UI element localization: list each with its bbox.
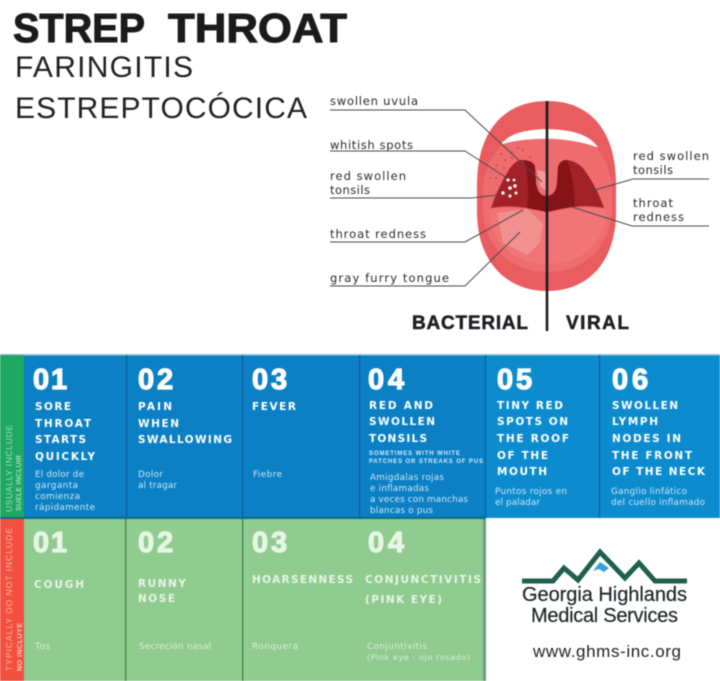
side label: usually include [0,355,24,518]
item: swollen lymph nodes [611,364,706,508]
callout: whitish spots [330,138,507,178]
logo: Georgia Highlands Medical Services: Georgia Highlands [522,584,687,606]
side label: do not include: TYPICALLY DO NOT INCLUDE [4,528,14,671]
item: red and swollen tonsils: SOMETIMES WITH WHITE [369,451,460,457]
item: hoarseness: HOARSENNESS [252,574,353,586]
item: swollen lymph nodes: OF THE NECK [612,466,706,478]
callout: viral throat redness: redness [633,210,684,224]
panel: typically do not include [0,517,486,681]
item: cough [33,527,84,652]
item: cough: 01 [33,527,67,559]
item: swollen lymph nodes: 06 [612,364,648,396]
callout: red swollen tonsils: red swollen [330,169,406,183]
title [13,5,347,125]
teeth [503,130,596,146]
icon: mountains [522,552,687,581]
item: conjunctivitis: CONJUNCTIVITIS [365,574,481,586]
callout: whitish spots: whitish spots [330,138,413,152]
item: sore throat: El dolor de [35,470,84,480]
item: hoarseness [252,527,353,652]
side label: usually include: SUELE INCLUIR [16,455,23,511]
callout: viral throat redness [572,196,709,226]
item: tiny red spots: OF THE [497,450,548,462]
side label: do not include [0,519,24,681]
item: tiny red spots: THE ROOF [497,433,569,445]
logo: Georgia Highlands Medical Services: www.ghms-inc.org [532,642,681,661]
item: red and swollen tonsils: SWOLLEN [369,416,435,428]
item: pain when swallowing: SWALLOWING [138,434,232,446]
item: swollen lymph nodes: THE FRONT [612,450,693,462]
palate red spots [489,147,531,179]
callout: swollen uvula: swollen uvula [330,94,418,108]
item: swollen lymph nodes: SWOLLEN [612,400,678,412]
side label: do not include: NO INCLUYE [17,623,24,671]
item: sore throat: comienza [35,492,80,502]
item: conjunctivitis [365,527,481,662]
illustration: open mouth [477,101,616,331]
item: tiny red spots: Puntos rojos en [495,487,567,497]
logo: Georgia Highlands Medical Services [522,552,687,661]
item: tiny red spots: SPOTS ON [497,416,568,428]
whitish spots [501,178,518,198]
item: pain when swallowing: PAIN [138,401,172,413]
label: bacterial: BACTERIAL [412,313,528,334]
item: sore throat: STARTS [35,434,86,446]
item: red and swollen tonsils: PATCHES OR STREAKS OF PUS [369,459,483,465]
callout: viral red swollen tonsils: red swollen [633,149,709,163]
logo: Georgia Highlands Medical Services: Medical Services [531,605,678,627]
callout: red swollen tonsils: tonsils [330,183,370,197]
item: tiny red spots: 05 [497,364,532,396]
item: tiny red spots: MOUTH [497,466,547,478]
item: pain when swallowing: Dolor [138,470,163,480]
tongue [489,208,607,264]
item: swollen lymph nodes: del cuello inflamado [611,498,705,508]
callout: throat redness [330,210,523,242]
item: red and swollen tonsils: blancas o pus [370,506,433,516]
item: fever [252,364,296,480]
item: fever: FEVER [252,401,296,413]
item: runny nose: RUNNY [138,578,186,590]
item: sore throat: rápidamente [35,503,95,513]
side label: usually include: USUALLY INCLUDE [4,425,14,512]
item: sore throat [33,364,95,513]
item: sore throat: QUICKLY [35,451,95,463]
item: runny nose: NOSE [138,593,175,605]
item: sore throat: THROAT [35,418,92,430]
item: red and swollen tonsils [368,364,483,516]
item: cough: Tos [34,642,50,652]
item: red and swollen tonsils: e inflamadas [370,484,429,494]
item: pain when swallowing: 02 [138,364,173,396]
callout: throat redness: throat redness [330,227,426,241]
item: hoarseness: 03 [252,527,287,559]
item: fever: Fiebre [253,470,282,480]
item: pain when swallowing: al tragar [138,481,177,491]
item: tiny red spots: el paladar [495,498,540,508]
label: viral: VIRAL [566,313,629,334]
item: swollen lymph nodes: LYMPH [612,416,658,428]
item: pain when swallowing [138,364,232,491]
item: sore throat: SORE [35,401,71,413]
item: hoarseness: Ronquera [252,642,298,652]
item: tiny red spots: TINY RED [497,400,563,412]
title: ESTREPTOCÓCICA [15,92,307,125]
item: sore throat: 01 [33,364,67,396]
item: fever: 03 [252,364,287,396]
item: swollen lymph nodes: NODES IN [612,433,681,445]
tongue patch [497,209,543,255]
callout: gray furry tongue [330,232,520,286]
throat and tonsils [491,160,604,212]
item: red and swollen tonsils: Amigdalas rojas [370,473,444,483]
item: conjunctivitis: Conjuntivitis [367,642,427,652]
title: THROAT [168,5,347,51]
item: runny nose: Secreción nasal [139,641,211,652]
callout: gray furry tongue: gray furry tongue [330,271,449,285]
panel: usually include [0,354,720,518]
callout: viral throat redness: throat [633,196,673,210]
callout: red swollen tonsils [330,169,497,198]
title: STREP [13,5,145,51]
callout: swollen uvula [330,94,542,182]
item: red and swollen tonsils: TONSILS [369,433,427,445]
item: swollen lymph nodes: Ganglio linfático [611,487,687,497]
title: FARINGITIS [15,51,193,84]
item: sore throat: garganta [35,481,78,491]
item: red and swollen tonsils: a veces con manchas [370,495,468,505]
item: runny nose: 02 [138,527,173,559]
item: conjunctivitis: (Pink eye - ojo rosado) [367,653,470,662]
callout: viral red swollen tonsils [588,149,709,192]
item: red and swollen tonsils: 04 [368,364,404,396]
item: runny nose [138,527,211,652]
callout: viral red swollen tonsils: tonsils [633,163,673,177]
item: red and swollen tonsils: RED AND [369,400,433,412]
item: pain when swallowing: WHEN [138,418,179,430]
item: conjunctivitis: (PINK EYE) [365,594,442,606]
item: conjunctivitis: 04 [368,527,404,559]
item: cough: COUGH [34,579,84,591]
item: tiny red spots [495,364,569,508]
